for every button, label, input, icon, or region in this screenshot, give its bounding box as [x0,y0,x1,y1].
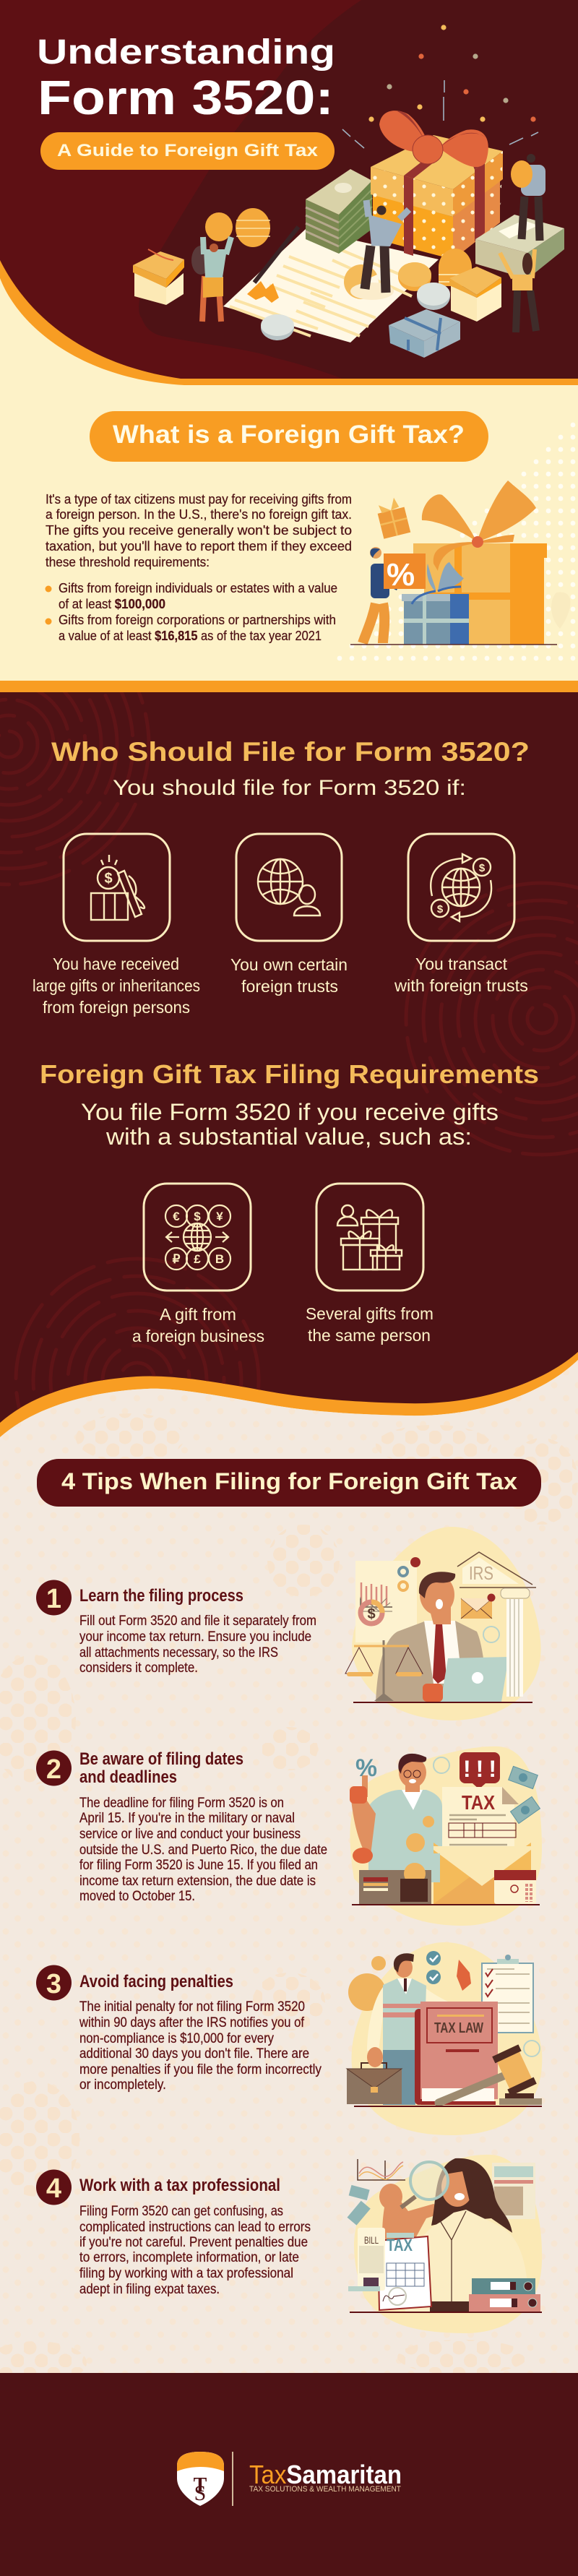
tip 4 [36,2155,542,2333]
tip 2 title: and deadlines [79,1767,177,1787]
label: large gifts: large gifts or inheritances [33,976,200,995]
binders [469,2278,540,2312]
bullet list: Gifts from foreign corporations or partnerships with [59,613,336,627]
bullet list [45,581,337,643]
tip 3 title: Avoid facing penalties [79,1972,233,1991]
icon: currencies and globe: B [215,1252,224,1266]
tip 1 text [79,1614,316,1676]
tip 3 [36,1942,542,2135]
section pill: 4 tips [37,1459,541,1507]
number badge 3: 3 [46,1969,61,1999]
number badge 1: 1 [46,1584,61,1614]
paragraph: a foreign person. In the U.S., there's no foreign gift tax. [46,507,352,522]
bill: BILL [364,2234,379,2246]
tip 2 text: for filing Form 3520 is June 15. If you filed an [79,1858,318,1873]
icon: currencies and globe: $ [194,1210,201,1223]
tip 2 text: service or live and conduct your business [79,1827,301,1842]
tip 4 text: adept in filing expat taxes. [79,2282,220,2297]
tip 3 text [79,1999,322,2093]
illustration: person with gifts [350,481,570,645]
tip 1 text: considers it complete. [79,1660,198,1676]
paragraph: these threshold requirements: [46,555,210,569]
logo shield: T [194,2474,207,2497]
small floating gift [375,496,410,539]
subtitle pill [40,132,335,170]
divider [232,2452,233,2506]
tip 4 text: Filing Form 3520 can get confusing, as [79,2204,283,2219]
tip 2 text: moved to October 15. [79,1889,195,1904]
label: transact: You transact [415,955,508,973]
person [363,547,426,643]
panel: tips background [0,1360,578,2385]
tax document [442,1787,519,1871]
tip 2 illustration: man and tax form: % [355,1754,377,1782]
IRS building [457,1552,536,1697]
person: % [387,557,415,593]
woman [382,2158,527,2312]
paragraph [46,492,352,569]
clipboard [482,1955,533,2033]
front gifts [389,267,501,358]
woman on right [500,249,536,332]
label: foreign business [132,1305,264,1345]
alert bubble [460,1752,500,1789]
book [415,2002,498,2105]
icon: globe with currency loop: $ [479,862,486,874]
panel: who should file and filing requirements [0,681,578,1437]
money stack [306,169,372,254]
icon: currencies and globe: ₽ [173,1252,181,1266]
label: foreign trusts: foreign trusts [241,977,338,996]
tip 3 illustration: tax law book [347,1942,542,2135]
paragraph: It's a type of tax citizens must pay for receiving gifts from [46,492,352,507]
icon: currencies and globe: ¥ [216,1210,223,1223]
tip 4 text: to errors, incomplete information, or late [79,2250,299,2265]
icon: globe and person [236,834,342,941]
money bills [347,2185,371,2226]
title [37,33,335,125]
bill [348,2228,385,2291]
woman with coin [191,208,270,322]
icon: several gifts and person [316,1184,423,1291]
subheading [81,1099,499,1150]
man in centre [365,200,409,293]
tip 4 text [79,2204,311,2297]
tax clipboard [378,2233,431,2310]
tip 3 text: within 90 days after the IRS notifies you of [79,2015,305,2030]
big gift [371,111,503,259]
title: Form 3520: [38,71,334,125]
calendar [494,1870,536,1904]
tip 4 text: complicated instructions can lead to errors [79,2220,311,2235]
tip 2 text: April 15. If you're in the military or naval [79,1811,295,1826]
blue gift [402,562,469,645]
label: foreign business: a foreign business [132,1327,264,1345]
tip 2 text: income tax return extension, the due date is [79,1874,316,1889]
heading: who should file: Who Should File for Form 3520? [51,737,530,767]
tip 1 illustration: man with laptop: $ [367,1606,376,1622]
tip 1 title: Learn the filing process [79,1586,243,1606]
number badge 2 [36,1750,72,1786]
tip 4 text: filing by working with a tax professional [79,2266,293,2281]
number badge 2: 2 [46,1754,61,1785]
bullet list: Gifts from foreign individuals or estates with a value [59,581,337,595]
panel: footer [0,2373,578,2576]
label: transact [394,955,528,995]
paper [223,229,439,343]
icon: globe with currency loop [408,834,514,941]
tip 4 title: Work with a tax professional [79,2176,280,2195]
magnifier [379,2162,448,2210]
icon: gift with coin [64,834,170,941]
wallet [359,1863,431,1904]
tip 3 text: more penalties if you file the form incorrectly [79,2062,322,2077]
label: large gifts: from foreign persons [43,998,190,1017]
book: TAX LAW [434,2020,483,2036]
left gift [133,249,184,305]
person with coin on gift [475,154,564,279]
envelope [461,1594,496,1619]
tip 3 text: non-compliance is $10,000 for every [79,2031,274,2046]
tip 1 text: your income tax return. Ensure you include [79,1629,311,1645]
briefcase [347,2047,402,2104]
tip 2 text: outside the U.S. and Puerto Rico, the due date [79,1843,327,1858]
illustration: gifts and people [133,25,564,358]
envelope [434,1843,531,1904]
pen [254,227,298,283]
IRS building: IRS [469,1562,493,1584]
tip 2 title: Be aware of filing dates [79,1749,243,1769]
label: foreign trusts: You own certain [230,955,348,974]
label: same person: Several gifts from [306,1304,434,1323]
logo shield [177,2452,224,2506]
tip 2 title [79,1749,243,1787]
subtitle pill: A Guide to Foreign Gift Tax [57,141,319,160]
panel: what is a foreign gift tax [45,411,578,665]
number badge 4 [36,2169,72,2205]
label: same person: the same person [308,1326,431,1345]
paragraph: taxation, but you'll have to report them if they exceed [46,539,352,553]
icon: currencies and globe [144,1184,251,1291]
section pill: 4 tips: 4 Tips When Filing for Foreign Gift Tax [61,1468,517,1494]
title: Understanding [37,33,335,72]
icon: gift with coin: $ [104,871,113,887]
tip 3 text: The initial penalty for not filing Form 3520 [79,1999,305,2015]
icon: currencies and globe: £ [194,1252,201,1266]
tax clipboard: TAX [387,2236,413,2255]
subheading: You file Form 3520 if you receive gifts [81,1099,499,1125]
calculator [492,2163,535,2219]
logo shield: S [194,2481,206,2505]
section pill heading [90,411,488,462]
label: transact: with foreign trusts [394,976,528,995]
tax document: TAX [462,1791,495,1814]
coin stack and coins [261,249,472,340]
line chart [358,2159,405,2180]
paragraph: The gifts you receive generally won't be subject to [46,523,352,538]
tip 3 text: additional 30 days you don't file. There are [79,2046,309,2062]
tip 4 text: if you're not careful. Prevent penalties due [79,2235,308,2250]
tip 1 text: all attachments necessary, so the IRS [79,1645,278,1660]
bullet list: of at least $100,000 [59,597,165,611]
number badge 3 [36,1965,72,2000]
icon: globe with currency loop: $ [437,903,444,916]
label: large gifts: You have received [53,955,179,973]
dotted background [329,415,578,665]
alert bubble: !!! [463,1756,496,1782]
tip 1 text: Fill out Form 3520 and file it separately from [79,1614,316,1629]
subheading: You should file for Form 3520 if: [113,776,466,800]
tip 4 illustration: woman with magnifier [347,2155,542,2333]
tip 2 illustration: man and tax form [350,1746,542,1926]
label: same person [306,1304,434,1345]
brand name: TaxSamaritan [249,2460,402,2489]
tip 2 text: The deadline for filing Form 3520 is on [79,1796,284,1811]
icon: currencies and globe: € [173,1210,180,1223]
label: large gifts [33,955,200,1017]
tip 1 [36,1527,541,1720]
tagline: TAX SOLUTIONS & WEALTH MANAGEMENT [249,2485,401,2494]
tip 1 illustration: man with laptop [345,1527,541,1720]
bullet list: a value of at least $16,815 as of the tax year 2021 [59,629,322,643]
section pill heading: What is a Foreign Gift Tax? [113,421,465,449]
heading: filing requirements: Foreign Gift Tax Filing Requirements [40,1059,539,1089]
tip 3 text: or incompletely. [79,2077,166,2093]
scales [345,1640,423,1701]
label: foreign business: A gift from [160,1305,236,1324]
money bills [509,1766,540,1824]
subheading: with a substantial value, such as: [105,1124,472,1150]
gavel [439,2044,542,2105]
tip 2 text [79,1796,327,1904]
panel: hero [0,0,578,385]
label: foreign trusts [230,955,348,996]
tip 2 [36,1746,542,1926]
number badge 4: 4 [46,2174,61,2204]
number badge 1 [36,1580,72,1616]
